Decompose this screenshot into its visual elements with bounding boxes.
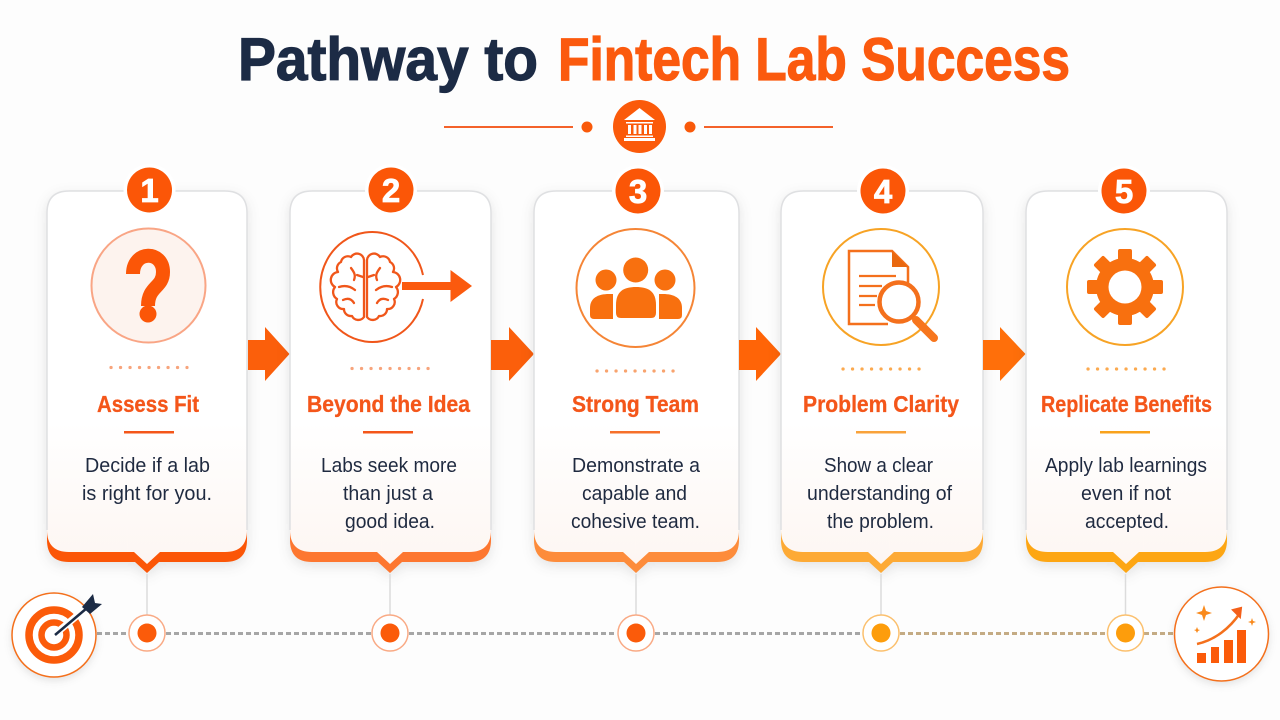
dotted separator bbox=[843, 367, 921, 371]
dotted separator bbox=[352, 367, 430, 370]
step heading: Beyond the Idea bbox=[307, 391, 471, 417]
step description: accepted. bbox=[1085, 511, 1169, 533]
step description: Decide if a lab bbox=[85, 455, 210, 477]
number badge 3 bbox=[612, 165, 664, 217]
step description: even if not bbox=[1081, 483, 1171, 505]
heading underline bbox=[363, 431, 413, 434]
number badge 2: 2 bbox=[382, 172, 400, 209]
step description bbox=[321, 455, 457, 533]
heading underline bbox=[124, 431, 174, 434]
card body bbox=[1026, 191, 1227, 573]
arrow: step 4 to 5 bbox=[983, 327, 1026, 381]
step description: is right for you. bbox=[82, 483, 212, 505]
icon: document with magnifier bbox=[823, 229, 939, 345]
panel: step 5 replicate benefits bbox=[1026, 165, 1227, 573]
number badge 4: 4 bbox=[874, 173, 893, 210]
number badge 5: 5 bbox=[1115, 173, 1133, 210]
icon: target with dart bbox=[12, 593, 102, 677]
arrow: step 1 to 2 bbox=[248, 327, 290, 381]
step description: good idea. bbox=[345, 511, 435, 533]
step description: Apply lab learnings bbox=[1045, 455, 1207, 477]
step description: cohesive team. bbox=[571, 511, 700, 533]
timeline marker 1 bbox=[129, 574, 165, 651]
timeline marker 4 bbox=[863, 574, 899, 651]
icon: gear bbox=[1067, 229, 1183, 345]
dotted separator bbox=[1088, 367, 1166, 371]
arrow: step 3 to 4 bbox=[739, 327, 781, 381]
title bbox=[238, 26, 1070, 93]
icon: question mark bbox=[92, 228, 206, 342]
timeline marker 3 bbox=[618, 574, 654, 651]
arrow: step 2 to 3 bbox=[491, 327, 534, 381]
number badge 1 bbox=[124, 164, 176, 216]
number badge 5 bbox=[1098, 165, 1150, 217]
title: Fintech Lab Success bbox=[558, 26, 1070, 93]
heading underline bbox=[1100, 431, 1150, 434]
step description: than just a bbox=[343, 483, 434, 505]
step description: Show a clear bbox=[824, 455, 933, 477]
panel: step 1 assess fit bbox=[47, 164, 247, 573]
step heading: Assess Fit bbox=[97, 391, 199, 417]
card body bbox=[47, 191, 247, 573]
number badge 3: 3 bbox=[629, 173, 647, 210]
heading underline bbox=[610, 431, 660, 434]
step description: Labs seek more bbox=[321, 455, 457, 477]
card body bbox=[534, 191, 739, 573]
step description: the problem. bbox=[827, 511, 934, 533]
connector: timeline dotted path bbox=[97, 632, 1175, 635]
icon: growth chart bbox=[1174, 587, 1268, 681]
timeline marker 5 bbox=[1108, 574, 1144, 651]
step description: capable and bbox=[582, 483, 687, 505]
number badge 4 bbox=[857, 165, 909, 217]
step description bbox=[571, 455, 701, 533]
step description bbox=[1045, 455, 1207, 533]
step heading: Strong Team bbox=[572, 391, 699, 417]
icon: team bbox=[576, 229, 694, 347]
step description bbox=[807, 455, 952, 533]
heading underline bbox=[856, 431, 906, 434]
number badge 2 bbox=[365, 164, 417, 216]
card body bbox=[781, 191, 983, 573]
step description bbox=[82, 455, 212, 505]
step heading: Problem Clarity bbox=[803, 391, 959, 417]
panel: step 3 strong team bbox=[534, 165, 739, 573]
title: Pathway to bbox=[238, 26, 538, 93]
number badge 1: 1 bbox=[140, 172, 159, 209]
step description: understanding of bbox=[807, 483, 952, 505]
panel: step 2 beyond the idea bbox=[290, 164, 491, 573]
step heading: Replicate Benefits bbox=[1041, 391, 1212, 417]
panel: step 4 problem clarity bbox=[781, 165, 983, 573]
header ornament with bank icon bbox=[444, 100, 833, 153]
dotted separator bbox=[597, 369, 675, 373]
dotted separator bbox=[111, 366, 187, 369]
icon: brain with arrow bbox=[320, 232, 472, 342]
timeline marker 2 bbox=[372, 574, 408, 651]
step description: Demonstrate a bbox=[572, 455, 701, 477]
card body bbox=[290, 191, 491, 573]
